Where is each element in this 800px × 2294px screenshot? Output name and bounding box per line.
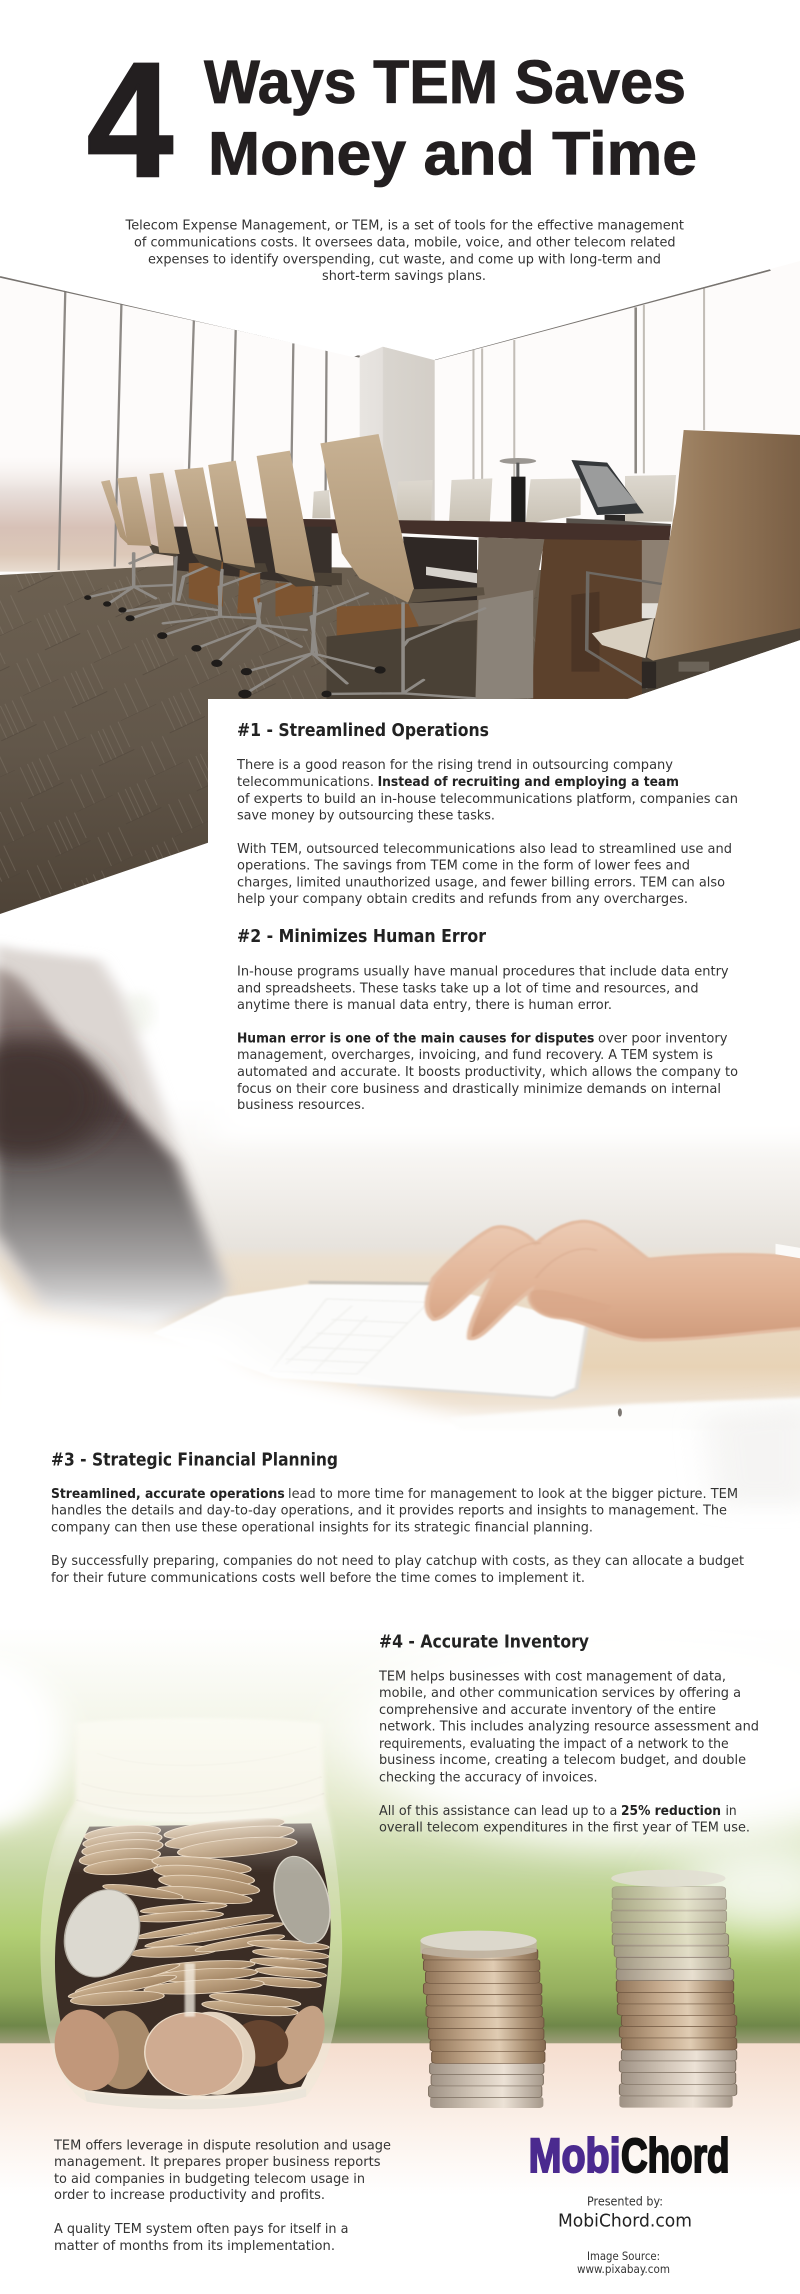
section 2 text: Human error is one of the main causes for disputes: [237, 1031, 594, 1047]
white text panel: [208, 699, 800, 934]
intro text: short-term savings plans.: [322, 268, 486, 284]
chair backs: [101, 434, 414, 603]
section 4 text: checking the accuracy of invoices.: [379, 1769, 598, 1785]
intro text: Telecom Expense Management, or TEM, is a set of tools for the effective management: [125, 218, 684, 234]
paper and pen at bottom right: [449, 1397, 800, 1430]
section 2 text: management, overcharges, invoicing, and fund recovery. A TEM system is: [237, 1047, 713, 1063]
coins in jar: [66, 1813, 330, 2019]
wooden panels under table: [188, 562, 419, 636]
concrete pillar: [360, 347, 435, 523]
hand: [427, 1221, 800, 1340]
distant chairs: [312, 475, 676, 524]
section 3 text: handles the details and day-to-day operations, and it provides reports and insights to management. The: [51, 1503, 727, 1519]
title: [87, 28, 697, 211]
dark coin mass: [55, 1823, 331, 2096]
section 2 text: automated and accurate. It boosts productivity, which allows the company to: [237, 1064, 738, 1080]
chair wheels: [84, 595, 386, 698]
white fade lower left: [0, 1264, 459, 1485]
jar: [40, 1718, 342, 2109]
section 3 text: Streamlined, accurate operations: [51, 1486, 285, 1502]
section 1 text: operations. The savings from TEM come in the form of lower fees and: [237, 858, 690, 874]
photo: conference room: [0, 250, 800, 930]
section 4 text: in: [726, 1803, 737, 1819]
table: [245, 518, 671, 541]
intro text: of communications costs. It oversees data, mobile, voice, and other telecom related: [134, 235, 676, 251]
white fade at top of wall: [214, 1051, 800, 1140]
title line 1: Ways TEM Saves: [204, 48, 686, 116]
light beam: [185, 1963, 195, 2017]
section 1 text: help your company obtain credits and refunds from any overcharges.: [237, 891, 688, 907]
white fade behind tall stack: [673, 1840, 800, 1933]
section 4 text: mobile, and other communication services by offering a: [379, 1685, 741, 1701]
section 1 text: [236, 721, 738, 907]
section 3 text: [51, 1451, 744, 1586]
section 1 text: charges, limited unauthorized usage, and fewer billing errors. TEM can also: [237, 874, 725, 890]
lamp: [499, 458, 536, 524]
heading 4: #4 - Accurate Inventory: [379, 1632, 590, 1652]
section 4 text: overall telecom expenditures in the first year of TEM use.: [379, 1820, 750, 1836]
photo: hands on laptop: [0, 944, 800, 1505]
jar neck: [77, 1726, 324, 1823]
intro text: expenses to identify overspending, cut waste, and come up with long-term and: [148, 252, 661, 268]
foreground chair: [647, 430, 800, 661]
seat of nearest side chair: [408, 587, 485, 603]
section 4 text: network. This includes analyzing resource assessment and: [379, 1719, 759, 1735]
faint plant: [122, 992, 153, 1034]
section 2 text: anytime there is manual data entry, there is human error.: [237, 997, 612, 1013]
chair seats: [148, 543, 342, 587]
section 1 text: There is a good reason for the rising trend in outsourcing company: [236, 757, 673, 773]
section 1 text: telecommunications.: [237, 774, 374, 790]
presented by: [558, 2194, 692, 2232]
green background: [0, 1627, 800, 2047]
title line 2: Money and Time: [208, 120, 697, 188]
section 1 text: of experts to build an in-house telecommunications platform, companies can: [237, 791, 738, 807]
small coin stack: [420, 1931, 545, 2108]
sleeve: [776, 1244, 800, 1259]
logo: MobiChord: [529, 2130, 730, 2183]
section 2 text: In-house programs usually have manual procedures that include data entry: [237, 964, 729, 980]
section 1 text: With TEM, outsourced telecommunications also lead to streamlined use and: [237, 841, 732, 857]
heading 2: #2 - Minimizes Human Error: [237, 927, 486, 947]
section 4 text: 25% reduction: [621, 1803, 721, 1819]
floor: [0, 565, 800, 930]
closing text: A quality TEM system often pays for itself in a: [54, 2221, 348, 2237]
table: [0, 2043, 800, 2294]
white fade at left: [0, 1657, 66, 1830]
closing text: management. It prepares proper business reports: [54, 2154, 381, 2170]
section 2 text: business resources.: [237, 1097, 365, 1113]
closing text: order to increase productivity and profits.: [54, 2187, 325, 2203]
section 2 text: and spreadsheets. These tasks take up a lot of time and resources, and: [237, 981, 698, 997]
keyboard: [153, 1282, 587, 1398]
section 3 text: lead to more time for management to look at the bigger picture. TEM: [288, 1486, 738, 1502]
tall coin stack: [611, 1870, 737, 2108]
jar glass: [40, 1793, 342, 2109]
logo: MobiChord: Chord: [621, 2130, 730, 2183]
section 2 text: over poor inventory: [598, 1031, 728, 1047]
heading 3: #3 - Strategic Financial Planning: [51, 1451, 338, 1471]
closing text: matter of months from its implementation.: [54, 2238, 335, 2254]
section 4 text: All of this assistance can lead up to a: [379, 1803, 617, 1819]
section 3 text: for their future communications costs well before the time comes to implement it.: [51, 1570, 585, 1586]
section 3 text: By successfully preparing, companies do not need to play catchup with costs, as they can allocate a budget: [51, 1553, 744, 1569]
jar bottom: [84, 2088, 306, 2109]
table pedestal: [531, 539, 643, 700]
section 2 text: focus on their core business and drastically minimize demands on internal: [237, 1081, 721, 1097]
section 4 text: business income, creating a telecom budget, and double: [379, 1752, 746, 1768]
section 4 text: comprehensive and accurate inventory of the entire: [379, 1702, 716, 1718]
hazy landscape through window: [0, 470, 184, 572]
carpet under table: [327, 620, 477, 700]
heading 1: #1 - Streamlined Operations: [237, 721, 489, 741]
section 4 text: TEM helps businesses with cost management of data,: [378, 1668, 726, 1684]
white fade at right: [352, 1627, 800, 1847]
closing text: to aid companies in budgeting telecom usage in: [54, 2171, 365, 2187]
image source: www.pixabay.com: [577, 2262, 670, 2276]
large coins: [93, 2011, 152, 2089]
desk and wall: [0, 1099, 800, 1426]
section 1 text: Instead of recruiting and employing a team: [378, 774, 679, 790]
intro text: [125, 218, 684, 284]
title numeral 4: 4: [87, 28, 173, 211]
presented by: Presented by:: [587, 2194, 663, 2209]
window frames: [0, 270, 770, 570]
presented by: MobiChord.com: [558, 2211, 692, 2232]
logo: MobiChord: Mobi: [529, 2130, 621, 2183]
chair bases: [88, 553, 485, 698]
section 1 text: save money by outsourcing these tasks.: [237, 808, 495, 824]
image source: [577, 2249, 670, 2276]
monitor on table: [571, 460, 644, 515]
section 4 text: [378, 1632, 759, 1836]
photo: coin jar and stacks: [0, 1627, 800, 2294]
closing text: TEM offers leverage in dispute resolution and usage: [53, 2138, 391, 2154]
section 3 text: company can then use these operational insights for its strategic financial planning.: [51, 1520, 593, 1536]
laptop lid: [0, 944, 227, 1326]
section 4 text: requirements, evaluating the impact of a network to the: [379, 1736, 729, 1752]
section 2 text: [237, 927, 738, 1113]
closing text: [53, 2138, 391, 2254]
image source: Image Source:: [587, 2249, 660, 2263]
